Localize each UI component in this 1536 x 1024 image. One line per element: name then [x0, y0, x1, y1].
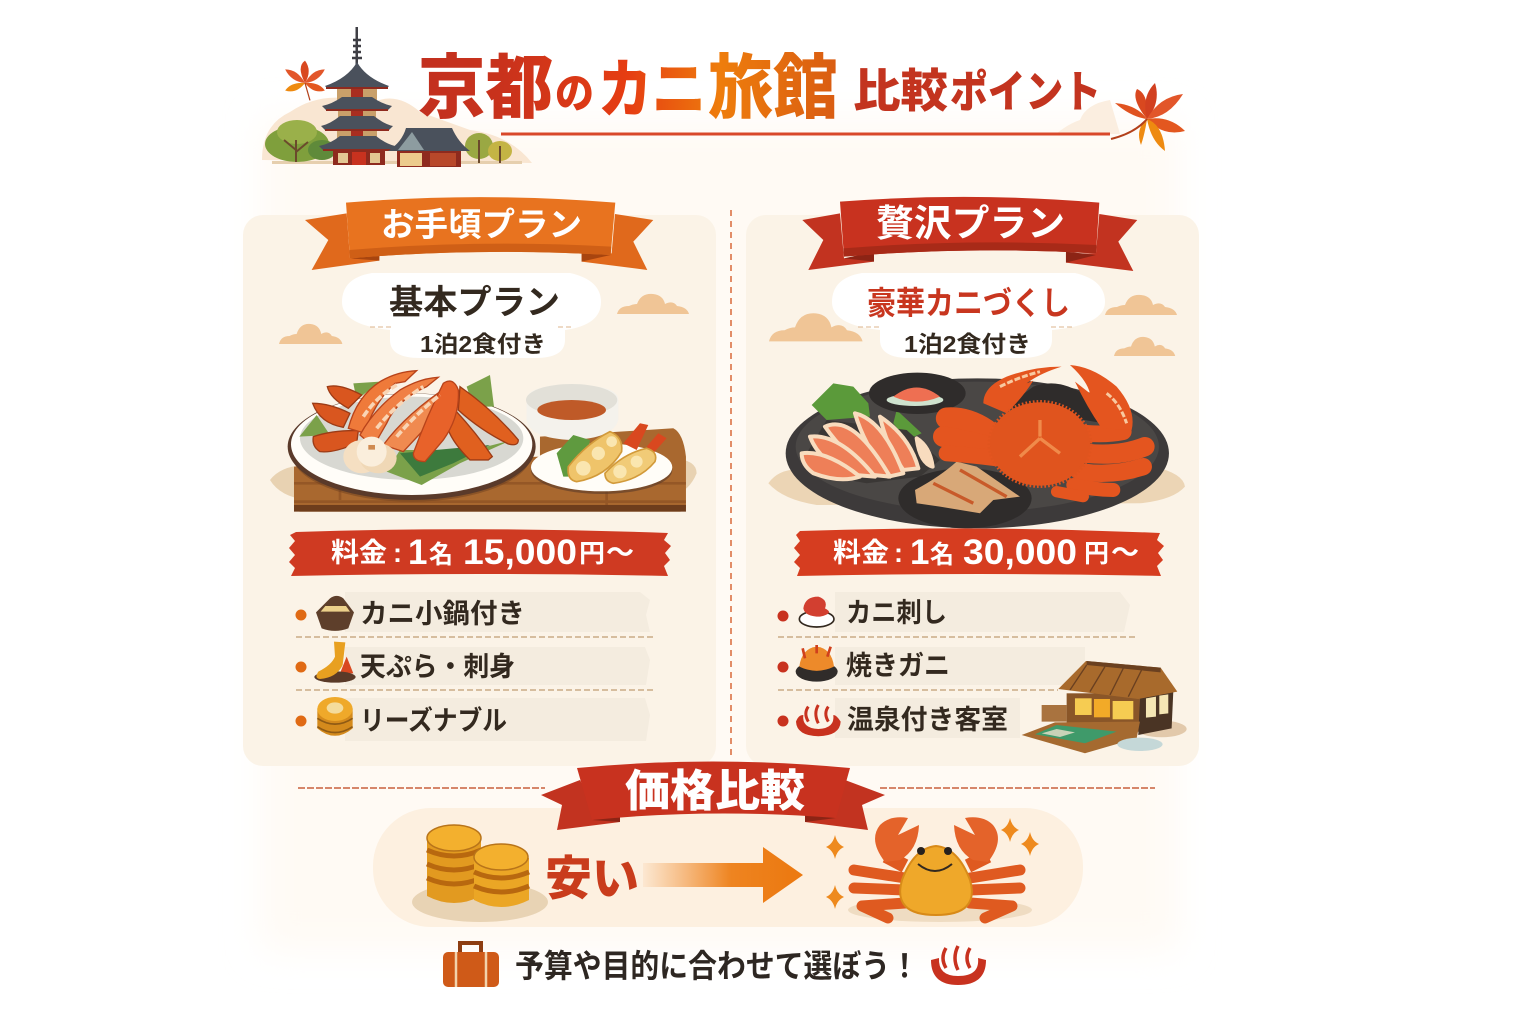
- panel: luxury plan: [746, 215, 1199, 766]
- icon: hot spring: [796, 705, 841, 736]
- list: affordable plan features: [296, 592, 653, 741]
- panel: affordable plan: [243, 215, 716, 766]
- ribbon: luxury plan: [802, 197, 1137, 271]
- price band: 30,000 yen: ～: [1111, 538, 1139, 568]
- clouds: [279, 294, 1177, 356]
- right trees: [465, 133, 512, 163]
- icon: smiling crab: [848, 817, 1032, 922]
- price band: 15,000 yen: 15,000: [463, 533, 577, 572]
- section divider: [298, 787, 1155, 789]
- header illustration: temple and hills: [262, 27, 532, 167]
- price band: 15,000 yen: ～: [606, 538, 634, 568]
- label bubble: basic plan: 基本プラン: [389, 284, 560, 322]
- icon: grilled crab: [796, 645, 838, 682]
- icon: coin stacks: [412, 825, 548, 922]
- arrow: price direction: [643, 847, 803, 903]
- price band: 30,000 yen: 円: [1084, 540, 1109, 568]
- label bubble: luxury crab: [832, 273, 1105, 358]
- price band: 15,000 yen: 名: [429, 541, 453, 569]
- label: cheap: 安い: [545, 852, 639, 905]
- icon: small hot pot: [316, 596, 354, 631]
- bullets: [778, 610, 788, 726]
- icon: suitcase: [443, 943, 499, 987]
- label bubble: basic plan: 1泊2食付き: [420, 331, 546, 357]
- list: luxury plan features: 焼きガニ: [846, 651, 950, 681]
- title: ポイント: [950, 67, 1101, 117]
- icon: tempura: [314, 642, 356, 683]
- centre divider: [730, 210, 732, 760]
- price band: 30,000 yen: 1: [910, 533, 929, 572]
- illustration: luxury crab platter: [768, 365, 1185, 528]
- list: affordable plan features: カニ小鍋付き: [360, 599, 525, 629]
- title: 京都: [418, 49, 553, 127]
- list: affordable plan features: 天ぷら・刺身: [360, 652, 515, 682]
- price band: 15,000 yen: 円: [579, 540, 605, 568]
- bullets: [296, 610, 306, 726]
- list: affordable plan features: リーズナブル: [360, 705, 507, 736]
- price band: 15,000 yen: 料金: [331, 538, 387, 568]
- price band: 30,000 yen: 30,000: [963, 533, 1077, 572]
- price band: 15,000 yen: 1: [408, 533, 427, 572]
- label bubble: basic plan: [342, 273, 601, 358]
- icon: maple leaf right: [1056, 83, 1185, 151]
- panel: price comparison pill: [373, 808, 1083, 927]
- title: カニ: [598, 54, 706, 126]
- ribbon: affordable plan: お手頃プラン: [381, 206, 582, 243]
- list: luxury plan features: 温泉付き客室: [847, 705, 1008, 735]
- title: [418, 49, 1101, 127]
- sparkles: [826, 818, 1039, 909]
- label bubble: luxury crab: 豪華カニづくし: [867, 285, 1070, 321]
- list: luxury plan features: カニ刺し: [846, 598, 947, 628]
- ribbon: price comparison: [541, 762, 885, 830]
- ribbon: price comparison: 価格比較: [625, 767, 805, 816]
- illustration: crab legs plate and tempura: [270, 371, 697, 512]
- small temple hall: [388, 128, 470, 167]
- price band: 30,000 yen: [794, 528, 1164, 576]
- price band: 30,000 yen: 名: [930, 541, 954, 569]
- pagoda: [319, 27, 395, 165]
- title: の: [555, 70, 594, 117]
- label bubble: luxury crab: 1泊2食付き: [904, 331, 1031, 357]
- price band: 15,000 yen: :: [393, 538, 402, 568]
- left trees: [265, 120, 336, 162]
- icon: hot spring footer: [931, 946, 986, 985]
- price band: 30,000 yen: 料金: [833, 538, 889, 568]
- icon: coins: [317, 697, 353, 736]
- price band: 30,000 yen: :: [894, 538, 903, 568]
- list: luxury plan features: [778, 592, 1138, 738]
- ribbon: luxury plan: 贅沢プラン: [876, 203, 1065, 244]
- title: 比較: [853, 65, 948, 117]
- illustration: ryokan with open-air bath: [1022, 661, 1187, 753]
- title: 旅館: [708, 49, 838, 127]
- ribbon: affordable plan: [305, 197, 653, 270]
- icon: maple leaf left: [285, 61, 325, 100]
- icon: crab sashimi: [799, 597, 834, 627]
- price band: 15,000 yen: [289, 529, 671, 576]
- closing message: 予算や目的に合わせて選ぼう！: [515, 948, 919, 984]
- title underline: [501, 132, 1110, 136]
